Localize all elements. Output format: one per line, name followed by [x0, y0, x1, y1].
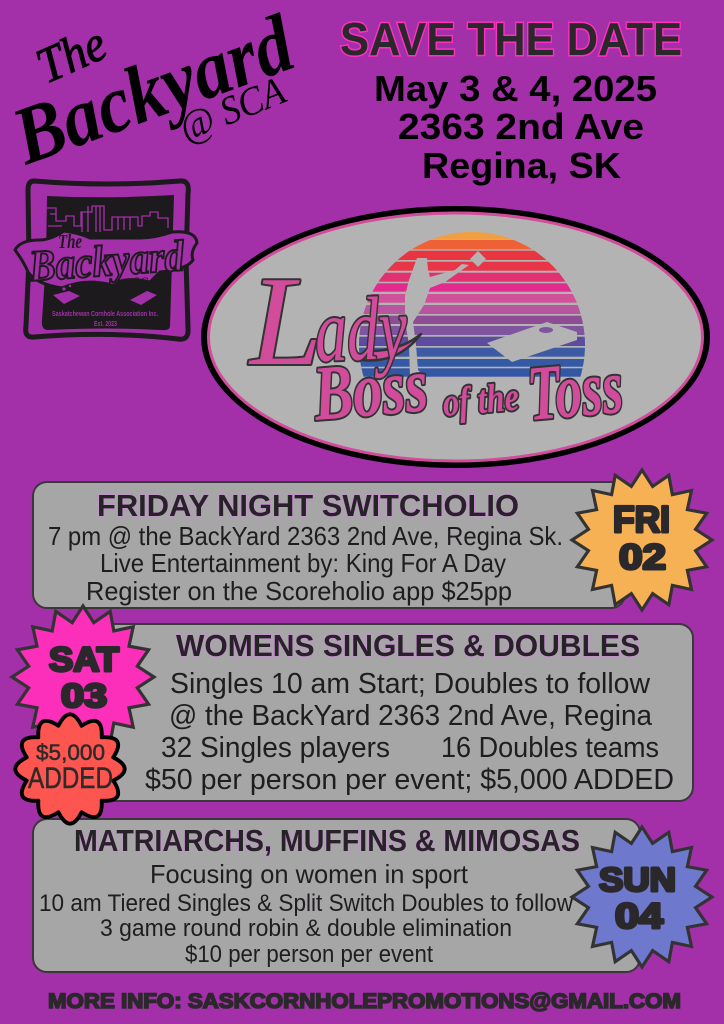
badge: $5,000 added: $5,000 — [36, 740, 105, 765]
badge: FRI 02 — [572, 470, 712, 610]
event date and address: Regina, SK — [422, 145, 621, 186]
striped sunset — [350, 232, 590, 377]
badge: FRI 02: FRI — [613, 499, 670, 540]
panel: Matriarchs, muffins and mimosas: $10 per person per event — [185, 941, 433, 968]
title: The Backyard @ SCA script wordmark: The — [28, 14, 114, 94]
cornhole board — [487, 322, 577, 362]
panel: Womens singles and doubles — [100, 624, 693, 801]
logo: The Backyard at SCA badge: Saskatchewan Cornhole Association Inc. — [52, 309, 158, 318]
badge: FRI 02: 02 — [619, 538, 666, 577]
panel: Womens singles and doubles: Singles 10 am Start; Doubles to follow — [170, 668, 651, 700]
panel: Womens singles and doubles: @ the BackYard 2363 2nd Ave, Regina — [169, 700, 653, 732]
panel: Friday night switcholio: FRIDAY NIGHT SWITCHOLIO — [97, 488, 519, 523]
panel: Lady Boss of the Toss oval: ady — [313, 279, 409, 381]
badge: SAT 03: SAT — [49, 641, 119, 679]
panel: Lady Boss of the Toss oval — [201, 206, 710, 468]
event date and address — [374, 68, 657, 186]
logo: The Backyard at SCA badge: Est. 2023 — [94, 321, 117, 328]
panel: Matriarchs, muffins and mimosas: 10 am Tiered Singles & Split Switch Doubles to follow — [39, 890, 574, 917]
skyline — [47, 206, 168, 232]
panel: Lady Boss of the Toss oval: Boss — [309, 340, 431, 437]
panel: Lady Boss of the Toss oval: of the — [441, 374, 520, 425]
event date and address: May 3 & 4, 2025 — [374, 68, 657, 109]
badge: SAT 03 — [12, 606, 154, 748]
panel: Womens singles and doubles: 32 Singles players — [161, 732, 390, 764]
panel: Friday night switcholio — [33, 482, 625, 608]
logo: The Backyard at SCA badge — [15, 181, 197, 339]
panel: Womens singles and doubles: WOMENS SINGLES & DOUBLES — [176, 628, 640, 663]
badge: SUN 04: SUN — [599, 861, 676, 898]
panel: Matriarchs, muffins and mimosas — [33, 819, 640, 972]
title: The Backyard @ SCA script wordmark: @ SCA — [173, 67, 292, 150]
badge: SAT 03: 03 — [61, 677, 107, 714]
panel: Womens singles and doubles: $50 per person per event; $5,000 ADDED — [145, 764, 674, 796]
logo: The Backyard at SCA badge: Backyard — [27, 231, 186, 291]
panel: Lady Boss of the Toss oval: L — [248, 250, 322, 392]
panel: Friday night switcholio: 7 pm @ the BackYard 2363 2nd Ave, Regina Sk. — [48, 521, 563, 551]
panel: Friday night switcholio: Live Entertainment by: King For A Day — [100, 548, 506, 578]
panel: Friday night switcholio: Register on the Scoreholio app $25pp — [86, 576, 512, 606]
panel: Matriarchs, muffins and mimosas: 3 game round robin & double elimination — [100, 915, 512, 942]
cornhole boards — [53, 285, 157, 305]
event date and address: 2363 2nd Ave — [398, 106, 644, 147]
banner — [15, 231, 197, 288]
badge: SUN 04: 04 — [615, 897, 664, 936]
logo: The Backyard at SCA badge: at SCA — [119, 275, 157, 291]
player silhouette — [405, 258, 469, 377]
heading: save the date: SAVE THE DATE — [340, 13, 682, 65]
thrown bag — [470, 251, 486, 267]
badge: $5,000 added — [15, 714, 125, 824]
panel: Lady Boss of the Toss oval: Toss — [524, 342, 626, 437]
panel: Matriarchs, muffins and mimosas: Focusing on women in sport — [150, 859, 469, 889]
panel: Matriarchs, muffins and mimosas: MATRIARCHS, MUFFINS & MIMOSAS — [74, 823, 580, 858]
footer: more info email: MORE INFO: SASKCORNHOLEPROMOTIONS@GMAIL.COM — [48, 990, 681, 1013]
logo: The Backyard at SCA badge: The — [58, 231, 82, 253]
panel: Womens singles and doubles: 16 Doubles teams — [441, 732, 659, 764]
logo lettering — [362, 334, 421, 360]
badge: SUN 04 — [572, 827, 712, 967]
badge: $5,000 added: ADDED — [28, 762, 113, 795]
